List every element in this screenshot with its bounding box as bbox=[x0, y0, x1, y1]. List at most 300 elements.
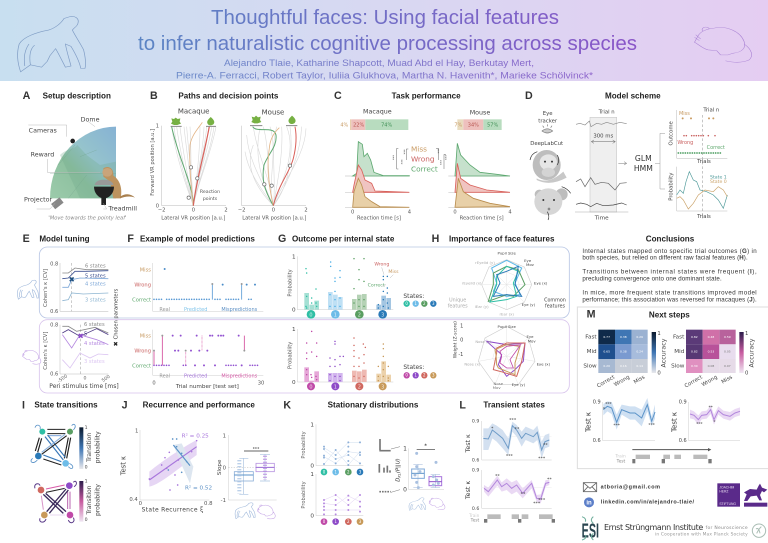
panel C: task performance: *** bbox=[400, 159, 404, 164]
panel C: task performance: Reaction time [s] bbox=[357, 215, 401, 221]
icon: monkey face bbox=[530, 150, 567, 183]
panel M: next steps: *** bbox=[696, 421, 703, 427]
left heatmap: 0.24 bbox=[636, 350, 643, 354]
icon: mouse face bbox=[534, 187, 571, 220]
panel M: next steps: Correct bbox=[684, 375, 704, 389]
panel D: model scheme: Model scheme bbox=[605, 91, 661, 100]
panel B: paths and decision points: 0 bbox=[192, 208, 195, 214]
panel E: model tuning: 5 states bbox=[85, 273, 106, 279]
row and column labels: Fast bbox=[585, 334, 597, 340]
bottom radar bbox=[478, 326, 535, 385]
outcome plot: Outcome bbox=[668, 121, 674, 145]
panel C: task performance: 4 bbox=[408, 209, 411, 215]
panel L: transient states: 0.6 bbox=[472, 506, 479, 512]
panel F: example of model predictions: Predicted bbox=[184, 307, 207, 313]
panel I: state transitions bbox=[22, 399, 101, 523]
panel A: setup description: Treadmill bbox=[107, 206, 137, 213]
panel L: transient states: Train bbox=[468, 513, 480, 519]
probability plot: State 1 bbox=[710, 174, 727, 180]
panel L: transient states: 0.6 bbox=[472, 458, 479, 464]
panel A: setup description: 'Move towards the pointy leaf' bbox=[48, 215, 126, 221]
panel M: next steps: Wrong bbox=[613, 375, 631, 388]
panel L: transient states: ** bbox=[547, 477, 552, 483]
mouse network bbox=[35, 481, 76, 523]
panel M: next steps: Test κ bbox=[585, 412, 593, 433]
logo: ESI: ESI bbox=[582, 521, 599, 543]
panel F: example of model predictions: Real bbox=[159, 307, 170, 313]
panel G: outcome per internal state: States: bbox=[403, 364, 424, 371]
outcome plot: Trials bbox=[696, 159, 711, 165]
panel L: transient states: ** bbox=[495, 473, 500, 479]
panel G: outcome per internal state: 1 bbox=[292, 255, 296, 261]
panel G: outcome per internal state: 2 bbox=[358, 384, 361, 390]
panel G: outcome per internal state: 0 bbox=[405, 301, 408, 306]
panel J: recurrence and performance: J bbox=[122, 399, 128, 411]
left heatmap: 0.65 bbox=[603, 350, 610, 354]
icon: envelope bbox=[583, 483, 597, 492]
top bars bbox=[304, 293, 319, 310]
panel E: model tuning: Model tuning bbox=[39, 234, 90, 243]
panel C: task performance: 4 bbox=[508, 209, 512, 215]
logo: Max Planck seal bbox=[752, 524, 766, 537]
panel D: model scheme bbox=[525, 90, 727, 221]
panel G: outcome per internal state bbox=[278, 233, 436, 390]
panel G: outcome per internal state: Outcome per internal state bbox=[292, 234, 395, 243]
panel L: transient states: Test κ bbox=[465, 434, 472, 453]
species outline boxes bbox=[39, 247, 569, 393]
panel G: outcome per internal state: 2 bbox=[358, 312, 361, 318]
panel G: outcome per internal state: 0 bbox=[309, 312, 313, 318]
panel E: model tuning: Peri stimulus time [ms] bbox=[49, 383, 119, 390]
outcome plot bbox=[668, 108, 727, 218]
panel K: stationary distributions bbox=[283, 399, 445, 525]
panel J: recurrence and performance: 1 bbox=[223, 434, 226, 440]
panel K: stationary distributions: 1 bbox=[310, 423, 314, 429]
panel K: stationary distributions: * bbox=[424, 444, 427, 450]
panel F: example of model predictions: 0 bbox=[152, 381, 156, 387]
panel C: task performance: 0 bbox=[351, 209, 354, 215]
title bbox=[138, 7, 637, 55]
authors: Pierre-A. Ferracci, Robert Taylor, Iuliia Glukhova, Martha N. Havenith*, Marieke Schölvinck* bbox=[176, 70, 594, 80]
panel M: next steps: 0 bbox=[657, 370, 661, 376]
panel D: model scheme: HMM bbox=[634, 164, 653, 173]
panel E: model tuning: 5 bbox=[84, 331, 87, 337]
left heatmap: 0.20 bbox=[603, 364, 610, 368]
panel H: importance of face features: Mov bbox=[493, 385, 501, 390]
icons: species bbox=[409, 498, 426, 510]
panel C: task performance: 74% bbox=[381, 123, 392, 129]
panel K: stationary distributions: 0 bbox=[323, 519, 326, 524]
panel F: example of model predictions: Trial number [test set] bbox=[175, 384, 239, 390]
panel I: state transitions: 1 bbox=[85, 479, 88, 485]
panels I and J bbox=[22, 399, 277, 523]
panel E: model tuning: 3 states bbox=[84, 359, 105, 365]
panel A: setup description: Setup description bbox=[43, 91, 111, 100]
panel H: importance of face features: 1 bbox=[460, 323, 463, 329]
institute name bbox=[604, 523, 748, 538]
panel J: recurrence and performance: Test κ bbox=[119, 456, 127, 476]
panel L: transient states: ** bbox=[543, 443, 548, 449]
panel F: example of model predictions: Wrong bbox=[134, 349, 151, 355]
panel G: outcome per internal state: Correct bbox=[368, 283, 385, 289]
panel M: next steps: Next steps bbox=[649, 310, 690, 319]
panel G: outcome per internal state: 3 bbox=[381, 384, 384, 390]
panel A: setup description: Projector bbox=[24, 197, 53, 204]
panel C: task performance: Macaque bbox=[363, 109, 392, 116]
panel D: model scheme: tracker bbox=[538, 119, 558, 125]
panel K: stationary distributions: Probability bbox=[301, 431, 307, 459]
panels K and L bbox=[283, 399, 555, 525]
panel E: model tuning: 3 states bbox=[85, 297, 106, 303]
panel C: task performance: 7% bbox=[454, 123, 463, 129]
mouse paths bbox=[245, 127, 306, 206]
panel F: example of model predictions: F bbox=[127, 233, 134, 245]
panel K: stationary distributions: Stationary distributions bbox=[328, 401, 419, 410]
left heatmap: 0.14 bbox=[636, 364, 643, 368]
panel C: task performance: 0 bbox=[453, 209, 457, 215]
panel C: task performance: *** bbox=[444, 155, 448, 160]
panel H: importance of face features: rEyelid (y) bbox=[475, 260, 495, 265]
probability plot: State 0 bbox=[710, 179, 727, 185]
panel M: next steps: 0.9 bbox=[679, 400, 687, 406]
panel H: importance of face features: Eye (x) bbox=[534, 281, 548, 286]
panel C: task performance: Task performance bbox=[392, 91, 461, 100]
top state circles bbox=[307, 310, 387, 319]
panel H: importance of face features: Eye bbox=[524, 258, 532, 263]
row and column labels: Slow bbox=[583, 364, 597, 370]
legend bbox=[411, 144, 438, 174]
panel B: paths and decision points bbox=[150, 90, 308, 221]
panel D: model scheme: Trial n bbox=[598, 109, 615, 115]
panel I: state transitions: I bbox=[22, 399, 25, 411]
panel E: model tuning: ✖ bbox=[69, 275, 75, 284]
axes bbox=[162, 126, 306, 206]
panel G: outcome per internal state: Probability bbox=[288, 269, 294, 297]
KL box plot bbox=[408, 448, 444, 489]
panel B: paths and decision points: Mouse bbox=[262, 108, 284, 116]
panel H: importance of face features: Mov bbox=[526, 262, 535, 267]
panel H: importance of face features: Mov bbox=[528, 339, 536, 344]
panel B: paths and decision points: Paths and decision points bbox=[178, 91, 279, 100]
panel M: next steps: 1 bbox=[657, 331, 661, 337]
panel C: task performance: 22% bbox=[353, 123, 364, 129]
panel G: outcome per internal state: 2 bbox=[423, 301, 426, 306]
panel L: transient states: Test bbox=[470, 518, 479, 524]
left heatmap: 0.16 bbox=[620, 364, 627, 368]
panel M: next steps: ** bbox=[709, 405, 714, 411]
panel C: task performance: Mouse bbox=[470, 109, 490, 116]
panel E: model tuning: E bbox=[23, 233, 30, 245]
panel G: outcome per internal state: Miss bbox=[388, 269, 399, 275]
logo: ESI bbox=[582, 517, 599, 543]
panel C: task performance bbox=[334, 90, 512, 221]
panels A and B bbox=[23, 90, 308, 221]
right heatmap: 0.82 bbox=[691, 350, 698, 354]
panel E: model tuning: 6 states bbox=[85, 263, 106, 269]
panel M: next steps: * bbox=[713, 420, 716, 426]
panel F: example of model predictions bbox=[127, 233, 264, 390]
conclusions: In mice, more frequent state transitions improved model bbox=[582, 290, 757, 297]
panel M: next steps: * bbox=[603, 406, 606, 412]
panels C and D bbox=[334, 90, 727, 221]
icons: species bbox=[235, 503, 255, 519]
panel H: importance of face features: rEyelid (x) bbox=[462, 281, 482, 286]
panel D: model scheme: DeepLabCut bbox=[530, 141, 563, 147]
panel G: outcome per internal state: 1 bbox=[334, 312, 337, 318]
contact and logos: atboria@gmail.com bbox=[601, 484, 660, 490]
conclusions: Conclusions bbox=[646, 234, 695, 243]
panel H: importance of face features: Pupil Size bbox=[498, 324, 516, 329]
panel A: setup description: Dome bbox=[81, 117, 100, 124]
panel B: paths and decision points: −2 bbox=[238, 208, 245, 214]
institute name: for Neuroscience bbox=[706, 525, 748, 531]
histograms bbox=[345, 176, 510, 207]
conclusions: Transitions between internal states were frequent (I), bbox=[582, 269, 757, 276]
panel M: next steps: 1 bbox=[745, 331, 748, 337]
panel J: recurrence and performance: 0.4 bbox=[129, 497, 138, 503]
probability plot bbox=[668, 167, 727, 220]
animal on treadmill bbox=[103, 167, 121, 198]
panel E: model tuning: Cohen's κ [CV] bbox=[43, 332, 49, 370]
panel B: paths and decision points: 0 bbox=[156, 203, 159, 209]
panel A: setup description: Reward bbox=[31, 152, 54, 159]
authors: Alejandro Tlaie, Katharine Shapcott, Muad Abd el Hay, Berkutay Mert, bbox=[224, 58, 534, 68]
panel F: example of model predictions: Mispredictions bbox=[221, 307, 258, 313]
panel H: importance of face features: Nose (y) bbox=[475, 339, 492, 344]
panel G: outcome per internal state: 0 bbox=[292, 380, 296, 386]
panel E: model tuning: -500 bbox=[57, 373, 69, 384]
panel E: model tuning: 0.8 bbox=[50, 323, 58, 329]
panel C: task performance: 34% bbox=[468, 123, 479, 129]
contact and logos bbox=[582, 483, 767, 543]
macaque network bbox=[31, 424, 75, 468]
panel K: stationary distributions: 3 bbox=[359, 469, 362, 474]
panel L: transient states: *** bbox=[506, 453, 513, 459]
header banner bbox=[0, 0, 768, 81]
panel L: transient states: L bbox=[459, 399, 466, 411]
left heatmap: 0.77 bbox=[603, 335, 610, 339]
panel M: next steps: Miss bbox=[633, 374, 646, 386]
panel B: paths and decision points: −2 bbox=[158, 208, 165, 214]
panel L: transient states: *** bbox=[538, 498, 546, 504]
outcome plot: Wrong bbox=[677, 140, 693, 146]
panel L: transient states: ** bbox=[521, 492, 526, 498]
right heatmap: 0.48 bbox=[708, 335, 714, 339]
panel H: importance of face features: 0 bbox=[460, 338, 463, 344]
panel E: model tuning: 0.6 bbox=[50, 309, 58, 315]
panel H: importance of face features: lEar (y) bbox=[475, 304, 489, 309]
panel E: model tuning: 4 states bbox=[84, 341, 105, 347]
conclusions: performance; this association was reversed for macaques (J). bbox=[582, 296, 757, 303]
panel G: outcome per internal state: 2 bbox=[423, 373, 426, 378]
panel G: outcome per internal state: 1 bbox=[414, 373, 417, 378]
panel K: stationary distributions: 1 bbox=[403, 446, 407, 453]
right heatmap: 0.08 bbox=[708, 364, 714, 368]
scatter bbox=[140, 430, 209, 500]
macaque paths bbox=[172, 127, 216, 206]
panel H: importance of face features: Weight (Z-score) bbox=[453, 321, 459, 358]
panel M: next steps: Test bbox=[616, 458, 625, 464]
logo: Joachim Herz Stiftung bbox=[717, 483, 767, 507]
panel K: stationary distributions: 1 bbox=[334, 519, 337, 524]
panel G: outcome per internal state: 1 bbox=[292, 327, 296, 333]
panel M: next steps: 0.6 bbox=[679, 438, 687, 444]
panel B: paths and decision points: points bbox=[203, 196, 218, 202]
panel M: next steps: *** bbox=[613, 423, 621, 429]
panel I: state transitions: probability bbox=[94, 431, 101, 463]
panel I: state transitions: 0 bbox=[85, 464, 88, 470]
left heatmap: 0.26 bbox=[636, 335, 643, 339]
panel M: next steps bbox=[577, 307, 768, 469]
bottom bars bbox=[304, 367, 319, 382]
panel B: paths and decision points: Forward VR position [a.u.] bbox=[150, 129, 156, 196]
panels conclusions and M bbox=[577, 234, 768, 469]
panel K: stationary distributions: KL bbox=[397, 473, 401, 478]
panel K: stationary distributions: 0 bbox=[403, 486, 407, 493]
panel M: next steps: 0.6 bbox=[593, 438, 601, 444]
left heatmap: 0.38 bbox=[620, 335, 627, 339]
panel H: importance of face features: Eye (y) bbox=[512, 382, 526, 387]
icon: linkedin bbox=[584, 497, 594, 507]
colorbars bbox=[652, 332, 656, 373]
panel B: paths and decision points: Lateral VR position [a.u.] bbox=[161, 215, 225, 221]
panel M: next steps: M bbox=[587, 308, 596, 320]
panel E: model tuning bbox=[23, 233, 119, 390]
logo: Joachim Herz Stiftung: HERZ bbox=[719, 489, 728, 493]
panel H: importance of face features: Eye bbox=[526, 334, 534, 339]
right heatmap: 0.59 bbox=[724, 335, 731, 339]
panel F: example of model predictions: Miss bbox=[140, 267, 151, 273]
panel K: stationary distributions: D bbox=[395, 478, 401, 482]
panel E: model tuning: 0.8 bbox=[50, 261, 58, 267]
panel E: model tuning: 0 bbox=[84, 376, 87, 382]
panel L: transient states: Test κ bbox=[465, 481, 472, 500]
panel F: example of model predictions: Mispredictions bbox=[221, 374, 258, 380]
icon: monkey in panel E bbox=[17, 280, 39, 299]
panel H: importance of face features: rEar (x) bbox=[499, 311, 514, 316]
panel C: task performance: 57% bbox=[487, 123, 498, 129]
panel K: stationary distributions: 2 bbox=[347, 469, 350, 474]
panel A: setup description: Cameras bbox=[29, 128, 57, 135]
panel C: task performance: *** bbox=[440, 160, 444, 165]
panel L: transient states: * bbox=[491, 426, 494, 432]
panel H: importance of face features: Eye (y) bbox=[522, 302, 536, 307]
panel J: recurrence and performance: -1 bbox=[221, 498, 226, 504]
panel G: outcome per internal state: States: bbox=[403, 293, 424, 300]
panel H: importance of face features: features bbox=[448, 304, 468, 310]
panel L: transient states: 0.9 bbox=[472, 419, 479, 425]
panel M: next steps: *** bbox=[648, 422, 656, 428]
significance brackets bbox=[397, 148, 446, 169]
panel J: recurrence and performance: R² = 0.25 bbox=[182, 433, 209, 440]
timeline bbox=[487, 514, 553, 519]
panels E and F bbox=[17, 233, 569, 393]
panel J: recurrence and performance: Recurrence and performance bbox=[143, 401, 255, 410]
left heatmap bbox=[598, 330, 648, 373]
panels G and H bbox=[278, 233, 566, 390]
panel K: stationary distributions: 0 bbox=[323, 469, 326, 474]
logo: Joachim Herz Stiftung: JOACHIM bbox=[719, 485, 735, 489]
panel F: example of model predictions: Real bbox=[159, 374, 170, 380]
panel B: paths and decision points: 0 bbox=[272, 208, 275, 214]
panel G: outcome per internal state: 3 bbox=[432, 373, 435, 378]
logo: Joachim Herz Stiftung: STIFTUNG bbox=[719, 502, 736, 506]
panel G: outcome per internal state: 0 bbox=[292, 307, 296, 313]
panel K: stationary distributions: 2 bbox=[347, 519, 350, 524]
panel B: paths and decision points: Reaction bbox=[200, 189, 220, 195]
conclusions: Internal states mapped onto specific trial outcomes (G) in bbox=[582, 248, 757, 255]
panel K: stationary distributions: 0 bbox=[310, 513, 314, 519]
right heatmap: 0.53 bbox=[708, 350, 714, 354]
title: to infer naturalistic cognitive processing across species bbox=[138, 33, 637, 55]
icon: rat outline bbox=[694, 27, 752, 62]
panel F: example of model predictions: Example of model predictions bbox=[140, 234, 255, 243]
panel D: model scheme: Eye bbox=[543, 111, 553, 117]
row and column labels: Fast bbox=[673, 334, 685, 340]
panel H: importance of face features: Nose (x) bbox=[464, 361, 481, 366]
stacked bars bbox=[350, 119, 351, 130]
panel E: model tuning: 4 states bbox=[85, 281, 106, 287]
legend: Correct bbox=[411, 165, 438, 174]
right heatmap: 0.82 bbox=[691, 335, 698, 339]
conclusions: both species, but relied on different raw facial features (H). bbox=[582, 255, 748, 262]
slope box plot bbox=[228, 435, 277, 500]
panel J: recurrence and performance: 0.8 bbox=[204, 501, 213, 507]
panel A: setup description: A bbox=[23, 90, 31, 102]
panel I: state transitions: State transitions bbox=[34, 401, 98, 410]
panel E: model tuning: 0.6 bbox=[50, 372, 58, 378]
panel D: model scheme: Time bbox=[594, 215, 609, 221]
panel J: recurrence and performance: 0 bbox=[139, 501, 143, 507]
panel J: recurrence and performance: 1 bbox=[135, 429, 138, 435]
conclusions: precluding convergence onto one dominant state. bbox=[582, 276, 722, 283]
panel M: next steps: Test κ bbox=[671, 412, 679, 433]
outcome plot: Trial n bbox=[702, 108, 719, 114]
right heatmap bbox=[686, 330, 736, 373]
panel J: recurrence and performance: Slope bbox=[217, 459, 223, 475]
panel I: state transitions: Transition bbox=[86, 433, 93, 463]
panel K: stationary distributions: 1 bbox=[334, 469, 337, 474]
top radar bbox=[482, 260, 532, 310]
panel D: model scheme: D bbox=[525, 90, 533, 102]
panel J: recurrence and performance: R² = 0.52 bbox=[185, 484, 213, 491]
panel G: outcome per internal state: 0 bbox=[405, 373, 408, 378]
panel J: recurrence and performance: 0 bbox=[223, 465, 227, 471]
panel C: task performance: *** bbox=[392, 155, 396, 160]
panel H: importance of face features: Pupil Size bbox=[498, 251, 516, 256]
panel G: outcome per internal state: 3 bbox=[381, 312, 384, 318]
panel I: state transitions: probability bbox=[94, 484, 101, 516]
panel M: next steps: Miss bbox=[721, 374, 734, 386]
panel F: example of model predictions: Correct bbox=[132, 297, 151, 303]
panel I: state transitions: 0 bbox=[85, 517, 88, 523]
legend: Miss bbox=[411, 144, 427, 153]
panel K: stationary distributions: 3 bbox=[359, 519, 362, 524]
panel J: recurrence and performance: State Recurrence ξ bbox=[142, 507, 203, 514]
panel E: model tuning: Chosen parameters bbox=[113, 288, 119, 339]
panel F: example of model predictions: Correct bbox=[132, 363, 151, 369]
panel M: next steps: Correct bbox=[596, 375, 616, 389]
outcome plot: Miss bbox=[679, 111, 690, 117]
panel E: model tuning: ✖ bbox=[78, 332, 84, 341]
panel E: model tuning: 500 bbox=[101, 374, 111, 384]
panel L: transient states bbox=[459, 399, 555, 524]
panel I: state transitions: 1 bbox=[85, 425, 88, 431]
dome bbox=[50, 127, 116, 198]
panel H: importance of face features: features bbox=[545, 304, 565, 310]
panel M: next steps: 0 bbox=[745, 370, 749, 376]
icon: monkey outline bbox=[18, 16, 86, 72]
